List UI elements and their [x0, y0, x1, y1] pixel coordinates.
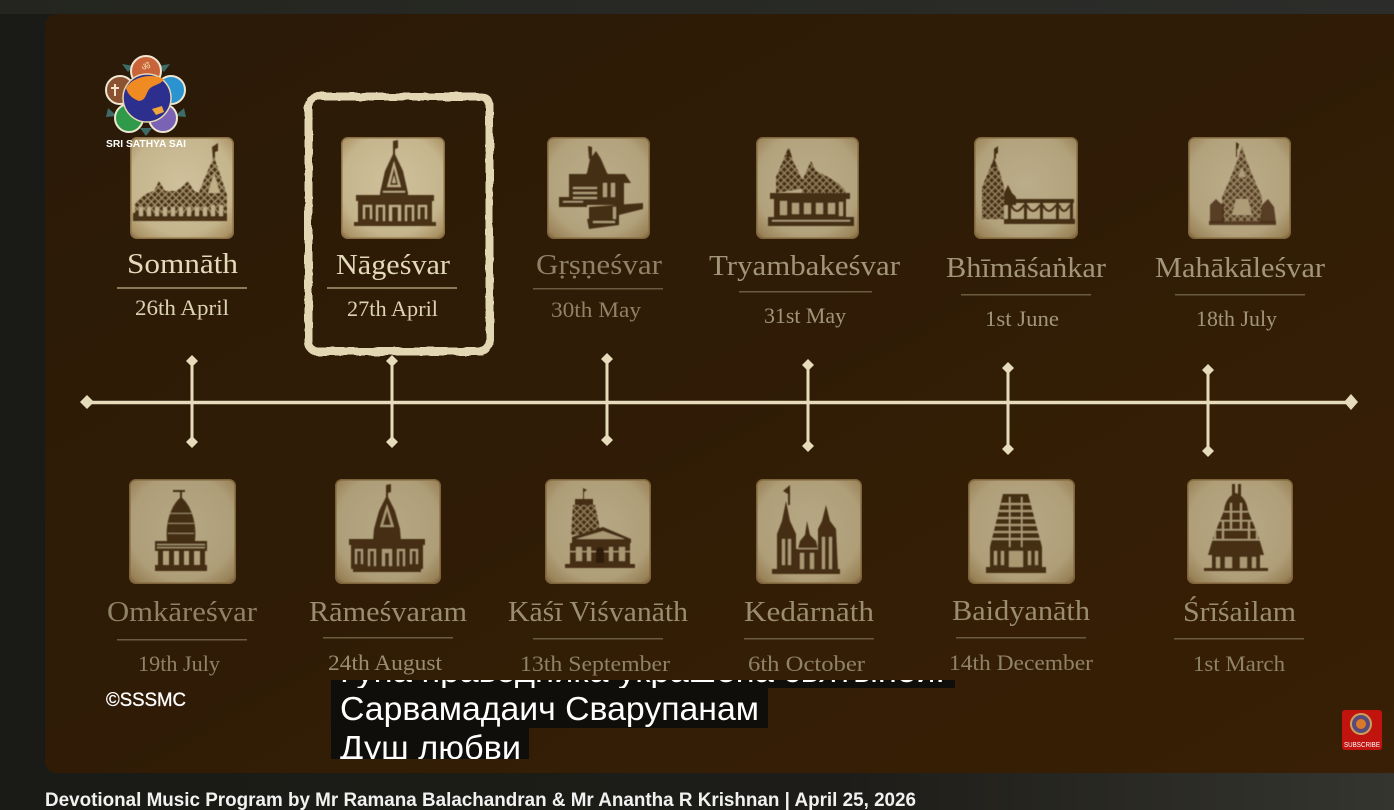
logo: Sri Sathya Sai: SRI SATHYA SAI [106, 138, 186, 150]
timeline axis [80, 353, 1358, 457]
label: Mahakaleshvar: Mahākāleśvar [1155, 253, 1326, 284]
label: Kashi Vishvanath: 13th September [520, 651, 671, 676]
highlight frame: Nageshvar [308, 96, 490, 352]
label: Bhimashankar: 1st June [985, 306, 1059, 331]
copyright: ©SSSMC [106, 690, 186, 711]
label: Mahakaleshvar: 18th July [1196, 306, 1277, 331]
label: Rameshvaram: 24th August [328, 650, 442, 675]
label: Srisailam: Śrīśailam [1183, 595, 1296, 628]
label: Grishneshvar: 30th May [551, 297, 641, 322]
card: Rameshvaram temple [336, 480, 440, 583]
card: Somnath temple [131, 138, 233, 238]
card: Srisailam temple [1188, 480, 1292, 583]
label: Grishneshvar [533, 250, 663, 322]
label: Kashi Vishvanath: Kāśī Viśvanāth [508, 597, 688, 628]
label: Baidyanath [949, 596, 1094, 675]
card: Omkareshvar temple [130, 480, 235, 583]
card: Kedarnath temple [757, 480, 861, 583]
subscribe badge: SUBSCRIBE [1344, 740, 1380, 749]
card: Kashi Vishvanath temple [546, 480, 650, 583]
caption overlay: Душ любви [340, 729, 521, 766]
label: Nageshvar [327, 250, 457, 321]
card: Bhimashankar temple [975, 138, 1077, 238]
card: Nageshvar temple [342, 138, 444, 238]
label: Rameshvaram: Rāmeśvaram [309, 597, 467, 628]
card: Baidyanath temple [969, 480, 1074, 583]
label: Kashi Vishvanath [508, 597, 688, 676]
card: Grishneshvar temple [548, 138, 649, 238]
label: Tryambakeshvar: 31st May [764, 303, 846, 328]
label: Nageshvar: Nāgeśvar [336, 250, 451, 281]
label: Rameshvaram [309, 597, 467, 675]
label: Srisailam: 1st March [1193, 651, 1285, 676]
label: Tryambakeshvar: Tryambakeśvar [709, 251, 901, 282]
label: Tryambakeshvar [709, 251, 901, 328]
card: Mahakaleshvar temple [1189, 138, 1290, 238]
label: Omkareshvar: Omkāreśvar [107, 597, 258, 628]
card: Tryambakeshvar temple [757, 138, 858, 238]
label: Kedarnath: Kedārnāth [744, 597, 874, 628]
label: Somnath [117, 249, 247, 320]
label: Baidyanath: 14th December [949, 650, 1094, 675]
label: Nageshvar: 27th April [347, 296, 438, 321]
label: Bhimashankar: Bhīmāśaṅkar [946, 253, 1107, 284]
caption overlay: Сарвамадаич Сварупанам [340, 690, 759, 727]
label: Somnath: Somnāth [127, 249, 238, 280]
label: Grishneshvar: Gṛṣṇeśvar [536, 250, 663, 281]
logo: Sri Sathya Sai [106, 56, 186, 150]
label: Mahakaleshvar [1155, 253, 1326, 331]
label: Kedarnath: 6th October [748, 651, 866, 676]
label: Omkareshvar [107, 597, 258, 676]
label: Baidyanath: Baidyanāth [952, 596, 1090, 627]
label: Kedarnath [744, 597, 874, 676]
top strip [0, 0, 1394, 14]
label: Srisailam [1174, 595, 1304, 676]
caption overlay [331, 680, 955, 759]
logo: Sri Sathya Sai: ॐ [141, 58, 151, 73]
subscribe badge [1342, 710, 1382, 750]
caption overlay: Гуна праводника украшена святыней. [340, 652, 945, 689]
label: Somnath: 26th April [135, 295, 229, 320]
label: Omkareshvar: 19th July [138, 651, 220, 676]
label: Bhimashankar [946, 253, 1107, 331]
